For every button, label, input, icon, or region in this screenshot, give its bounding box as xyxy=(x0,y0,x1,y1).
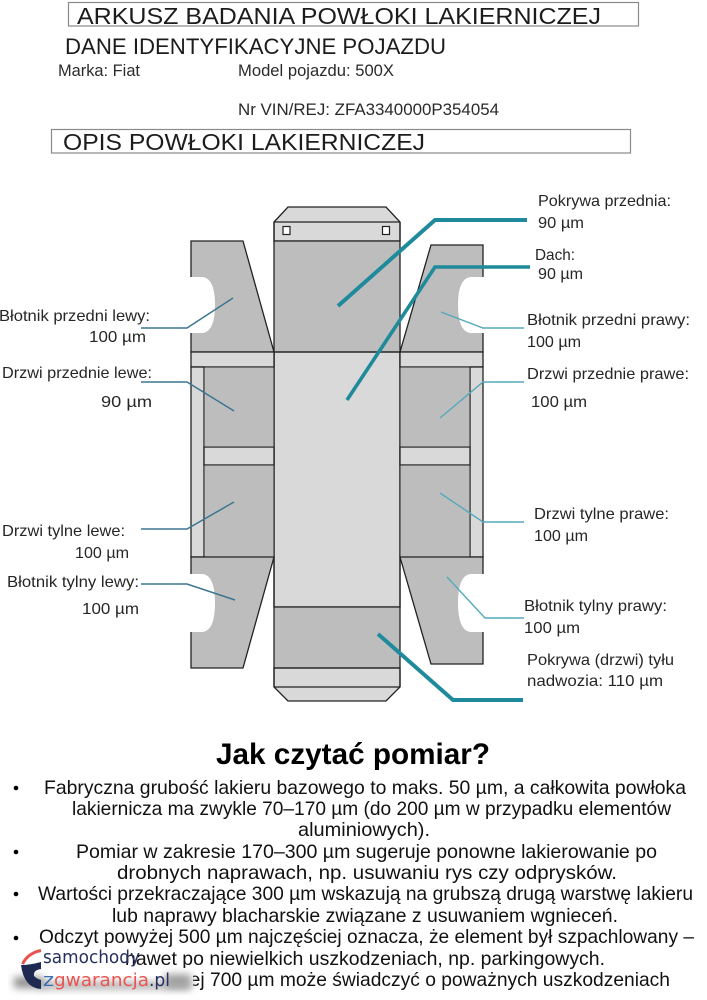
label: tailgate: nadwozia: 110 µm xyxy=(527,673,663,690)
leader line: front hood xyxy=(338,220,527,306)
label: tailgate xyxy=(527,652,674,690)
label: left rear fender: 100 µm xyxy=(82,601,139,618)
bullet 3: Wartości przekraczające 300 µm wskazują na grubszą drugą warstwę lakieru xyxy=(38,883,693,905)
watermark logo: z xyxy=(43,970,54,991)
panel: rear bumper area xyxy=(274,668,400,701)
leader line: left rear fender xyxy=(141,584,235,600)
label: left front fender xyxy=(0,308,150,346)
title box: ARKUSZ BADANIA POWŁOKI LAKIERNICZEJ xyxy=(77,3,601,29)
panel: left front door xyxy=(204,368,274,446)
bullet 1: lakiernicza ma zwykle 70–170 µm (do 200 µm w przypadku elementów xyxy=(72,798,672,820)
label: left front door: 90 µm xyxy=(101,394,152,411)
label: roof: 90 µm xyxy=(538,266,583,283)
panel: left door frame xyxy=(191,352,274,557)
bullet 3: lub naprawy blacharskie związane z usuwaniem wgnieceń. xyxy=(112,905,618,927)
watermark logo: samochody xyxy=(43,947,140,968)
label: front hood: 90 µm xyxy=(538,215,584,232)
panel: front bumper area xyxy=(274,207,400,241)
panel: left rear door xyxy=(204,466,274,556)
panel: right front fender xyxy=(400,245,483,352)
panel: front hood xyxy=(274,241,400,352)
label: left rear door: 100 µm xyxy=(75,545,129,562)
watermark logo xyxy=(14,947,193,992)
label: front hood: Pokrywa przednia: xyxy=(538,193,671,210)
watermark logo: .pl xyxy=(149,970,170,991)
leader line: roof xyxy=(347,267,530,400)
watermark logo: gwarancja xyxy=(54,970,149,991)
label: left front door: Drzwi przednie lewe: xyxy=(2,365,152,382)
label: right rear fender xyxy=(524,598,667,637)
car body diagram xyxy=(191,207,483,701)
label: right front door: Drzwi przednie prawe: xyxy=(527,366,689,383)
label: left front fender: Błotnik przedni lewy: xyxy=(0,308,150,325)
label: left rear fender: Błotnik tylny lewy: xyxy=(7,574,139,591)
bullet 4: Odczyt powyżej 500 µm najczęściej oznacza, że element był szpachlowany – xyxy=(39,926,694,948)
label: right rear door xyxy=(534,506,669,545)
label: left front door xyxy=(2,365,152,411)
panel: right rear fender xyxy=(400,557,483,664)
bullet 2: drobnych naprawach, np. usuwaniu rys czy odprysków. xyxy=(117,862,617,884)
section heading box: coating description: OPIS POWŁOKI LAKIERNICZEJ xyxy=(63,129,425,155)
label: left rear door: Drzwi tylne lewe: xyxy=(2,523,125,540)
label: right rear door: Drzwi tylne prawe: xyxy=(534,506,669,523)
leader line: right front door xyxy=(440,382,524,418)
vehicle model: Model pojazdu: 500X xyxy=(238,61,394,80)
label: roof: Dach: xyxy=(535,247,575,264)
panel: tailgate xyxy=(274,607,400,668)
bullet 1: aluminiowych). xyxy=(298,819,430,841)
leader line: left front fender xyxy=(141,298,233,328)
label: left front fender: 100 µm xyxy=(89,329,146,346)
label: right rear fender: Błotnik tylny prawy: xyxy=(524,598,667,615)
panel: left front fender xyxy=(191,241,274,352)
bullet 3 xyxy=(14,883,693,927)
label: tailgate: Pokrywa (drzwi) tyłu xyxy=(527,652,674,669)
bullet list: measurement guide xyxy=(14,777,694,991)
VIN number: Nr VIN/REJ: ZFA3340000P354054 xyxy=(238,100,499,119)
label: right rear fender: 100 µm xyxy=(524,620,580,637)
panel: right rear door xyxy=(400,466,470,556)
bullet 1 xyxy=(14,777,686,841)
bullet 2: Pomiar w zakresie 170–300 µm sugeruje ponowne lakierowanie po xyxy=(76,841,657,863)
bullet 1: Fabryczna grubość lakieru bazowego to maks. 50 µm, a całkowita powłoka xyxy=(44,777,686,799)
label: right front fender xyxy=(527,312,690,351)
heading: vehicle identification: DANE IDENTYFIKACYJNE POJAZDU xyxy=(65,34,446,59)
panel: right front door xyxy=(400,368,470,446)
leader line: left front door xyxy=(141,382,234,411)
section heading box: coating description xyxy=(52,129,630,155)
heading: how to read the measurement: Jak czytać pomiar? xyxy=(216,738,490,771)
bullet 5: Odczyt powyżej 700 µm może świadczyć o poważnych uszkodzeniach xyxy=(70,969,670,991)
label: front hood xyxy=(538,193,671,232)
bullet 4: nawet po niewielkich uszkodzeniach, np. parkingowych. xyxy=(125,948,605,970)
panel: left rear fender xyxy=(191,557,274,668)
label: left rear fender xyxy=(7,574,139,618)
label: right rear door: 100 µm xyxy=(534,528,588,545)
leader line: right rear door xyxy=(440,493,524,522)
label: right front fender: Błotnik przedni prawy: xyxy=(527,312,690,329)
label: roof xyxy=(535,247,583,283)
icon: steering wheel xyxy=(21,950,41,989)
label: right front fender: 100 µm xyxy=(527,334,581,351)
panel: roof xyxy=(274,352,400,607)
label: right front door xyxy=(527,366,689,411)
bullet 4 xyxy=(14,926,694,970)
leader line: tailgate xyxy=(378,634,523,700)
label: right front door: 100 µm xyxy=(531,394,587,411)
leader line: right rear fender xyxy=(447,577,524,618)
bullet 2 xyxy=(14,841,657,884)
panel: right door frame xyxy=(400,352,483,557)
leader line: right front fender xyxy=(441,312,524,328)
vehicle make: Marka: Fiat xyxy=(58,61,140,80)
leader line: left rear door xyxy=(141,502,234,529)
central outlines xyxy=(274,222,400,687)
label: left rear door xyxy=(2,523,129,562)
